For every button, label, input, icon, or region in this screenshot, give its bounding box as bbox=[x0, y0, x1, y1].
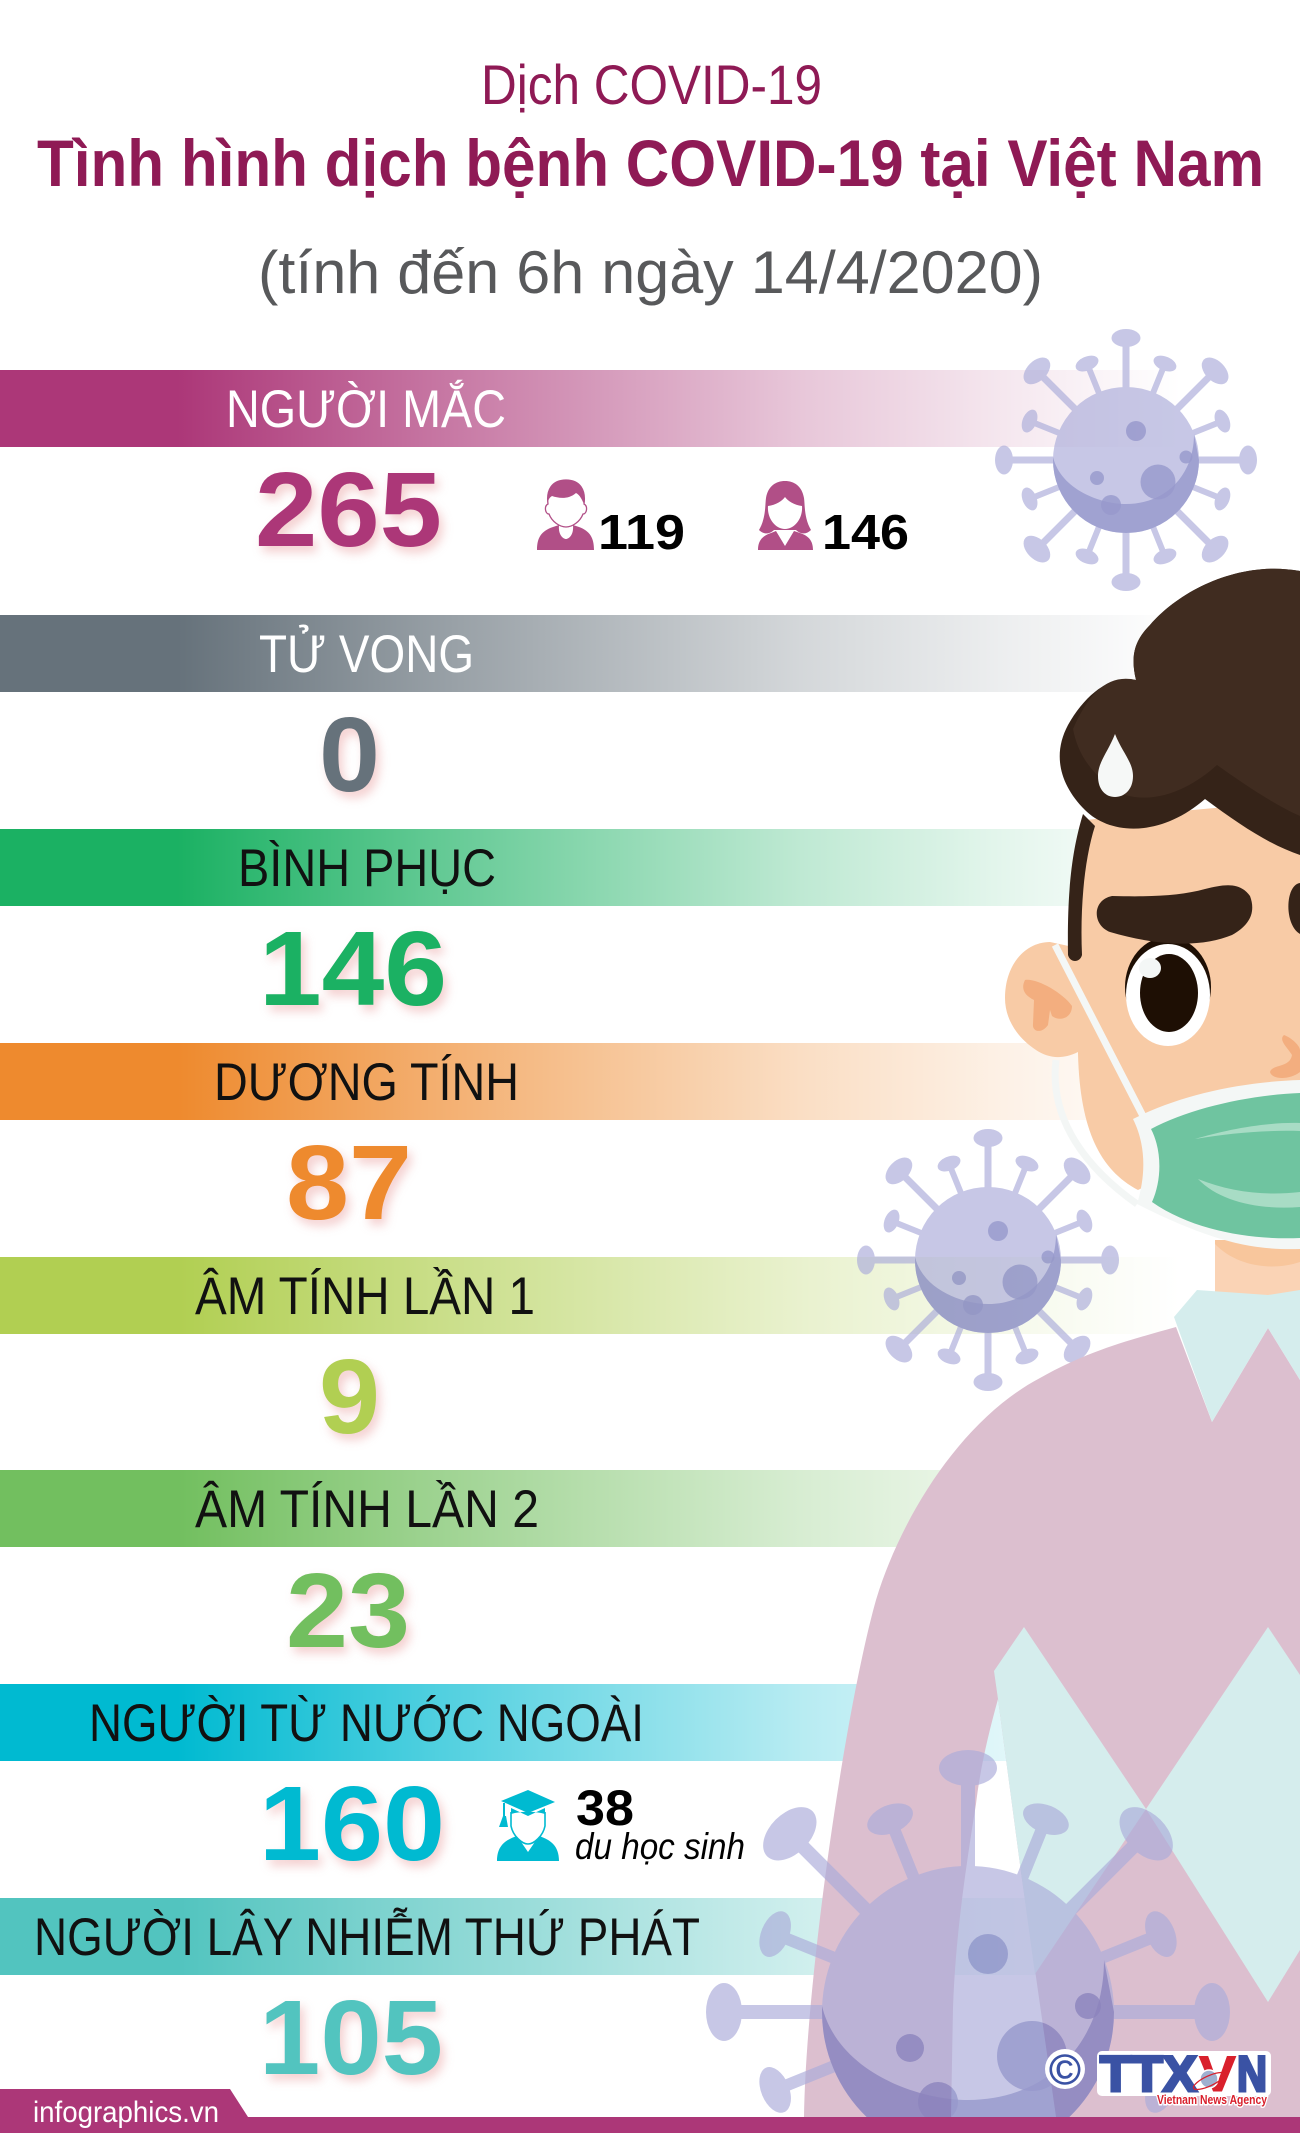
caption: du học sinh: du học sinh bbox=[575, 1826, 745, 1867]
label: ÂM TÍNH LẦN 1: ÂM TÍNH LẦN 1 bbox=[195, 1266, 535, 1326]
bar: bình phục bbox=[0, 829, 1181, 906]
count: 146 women: 146 bbox=[822, 506, 909, 560]
pupil bbox=[1140, 954, 1198, 1032]
illustration: person with mask bbox=[804, 569, 1300, 2117]
nose bbox=[1270, 1035, 1300, 1078]
sweater diamond right bbox=[1146, 1627, 1300, 2002]
header: title block bbox=[37, 53, 1264, 306]
label: BÌNH PHỤC: BÌNH PHỤC bbox=[238, 839, 496, 898]
label: NGƯỜI LÂY NHIỄM THỨ PHÁT: NGƯỜI LÂY NHIỄM THỨ PHÁT bbox=[34, 1906, 700, 1967]
footer source text: infographics.vn bbox=[33, 2096, 219, 2129]
date subtitle: (tính đến 6h ngày 14/4/2020) bbox=[258, 239, 1043, 306]
label: DƯƠNG TÍNH: DƯƠNG TÍNH bbox=[214, 1053, 519, 1112]
agency initial N: N bbox=[1237, 2046, 1267, 2102]
bar: tử vong bbox=[0, 615, 1181, 692]
ear bbox=[1005, 942, 1078, 1057]
left eyebrow bbox=[1097, 885, 1252, 944]
bar: dương tính bbox=[0, 1043, 1181, 1120]
right eyebrow bbox=[1288, 883, 1300, 934]
bar: người lây nhiễm thứ phát bbox=[0, 1898, 1181, 1975]
value: 23: 23 bbox=[286, 1552, 410, 1670]
value: 265: 265 bbox=[255, 451, 442, 569]
neck shadow bbox=[1215, 1240, 1300, 1266]
inner ear bbox=[1023, 980, 1072, 1031]
label: ÂM TÍNH LẦN 2: ÂM TÍNH LẦN 2 bbox=[195, 1479, 539, 1539]
agency initial V: V bbox=[1199, 2046, 1237, 2102]
icon: student bbox=[497, 1790, 559, 1861]
agency initials TTX: TTX bbox=[1100, 2046, 1197, 2102]
value: 160: 160 bbox=[259, 1765, 445, 1883]
water drop bbox=[1098, 734, 1133, 797]
bar: âm tính lần 1 bbox=[0, 1257, 1181, 1334]
icon: male bbox=[537, 480, 594, 550]
mask band bbox=[1133, 1080, 1300, 1249]
eye white bbox=[1126, 944, 1210, 1046]
hair back bbox=[1060, 569, 1300, 855]
logo: TTXVN bbox=[1045, 2046, 1271, 2107]
logo backing bbox=[1097, 2051, 1271, 2096]
icon: virus bottom bbox=[706, 1750, 1230, 2117]
count: 119 men: 119 bbox=[598, 506, 685, 560]
bar: người mắc bbox=[0, 370, 1181, 447]
collar bbox=[1174, 1290, 1300, 1422]
icon: female bbox=[758, 481, 813, 550]
face bbox=[1078, 800, 1300, 1190]
side hair strand bbox=[1068, 814, 1095, 961]
footer band bbox=[0, 2089, 1300, 2133]
label: TỬ VONG: TỬ VONG bbox=[259, 624, 474, 684]
upper mask strap bbox=[1055, 945, 1143, 1116]
count: 38: 38 bbox=[576, 1780, 634, 1836]
copyright disc bbox=[1045, 2049, 1085, 2089]
value: 105: 105 bbox=[259, 1979, 443, 2097]
mask fabric bbox=[1151, 1093, 1300, 1238]
icon: virus top right bbox=[995, 329, 1257, 591]
lower mask strap bbox=[1055, 1060, 1137, 1204]
icon: virus middle bbox=[857, 1129, 1119, 1391]
sweater bbox=[804, 1327, 1300, 2117]
value: 0: 0 bbox=[319, 696, 380, 814]
copyright mark: © bbox=[1049, 2046, 1081, 2094]
label: NGƯỜI TỪ NƯỚC NGOÀI: NGƯỜI TỪ NƯỚC NGOÀI bbox=[89, 1694, 644, 1753]
mask fold top bbox=[1195, 1123, 1300, 1139]
mask bbox=[1133, 1080, 1300, 1249]
globe bbox=[1191, 2069, 1227, 2093]
agency name: Vietnam News Agency bbox=[1157, 2092, 1268, 2107]
bar: người từ nước ngoài bbox=[0, 1684, 1181, 1761]
value: 87: 87 bbox=[286, 1124, 412, 1242]
label: NGƯỜI MẮC: NGƯỜI MẮC bbox=[226, 378, 506, 439]
bar: âm tính lần 2 bbox=[0, 1470, 1181, 1547]
sweater diamond left bbox=[994, 1627, 1146, 1974]
kicker: Dịch COVID-19: Dịch COVID-19 bbox=[481, 53, 822, 116]
neck bbox=[1215, 1240, 1300, 1297]
eye rim bbox=[1125, 937, 1211, 1037]
eye highlight bbox=[1139, 958, 1161, 978]
mask fold bottom bbox=[1198, 1179, 1300, 1208]
hair highlight bbox=[1073, 569, 1300, 816]
value: 9: 9 bbox=[319, 1338, 380, 1456]
value: 146: 146 bbox=[259, 910, 447, 1028]
